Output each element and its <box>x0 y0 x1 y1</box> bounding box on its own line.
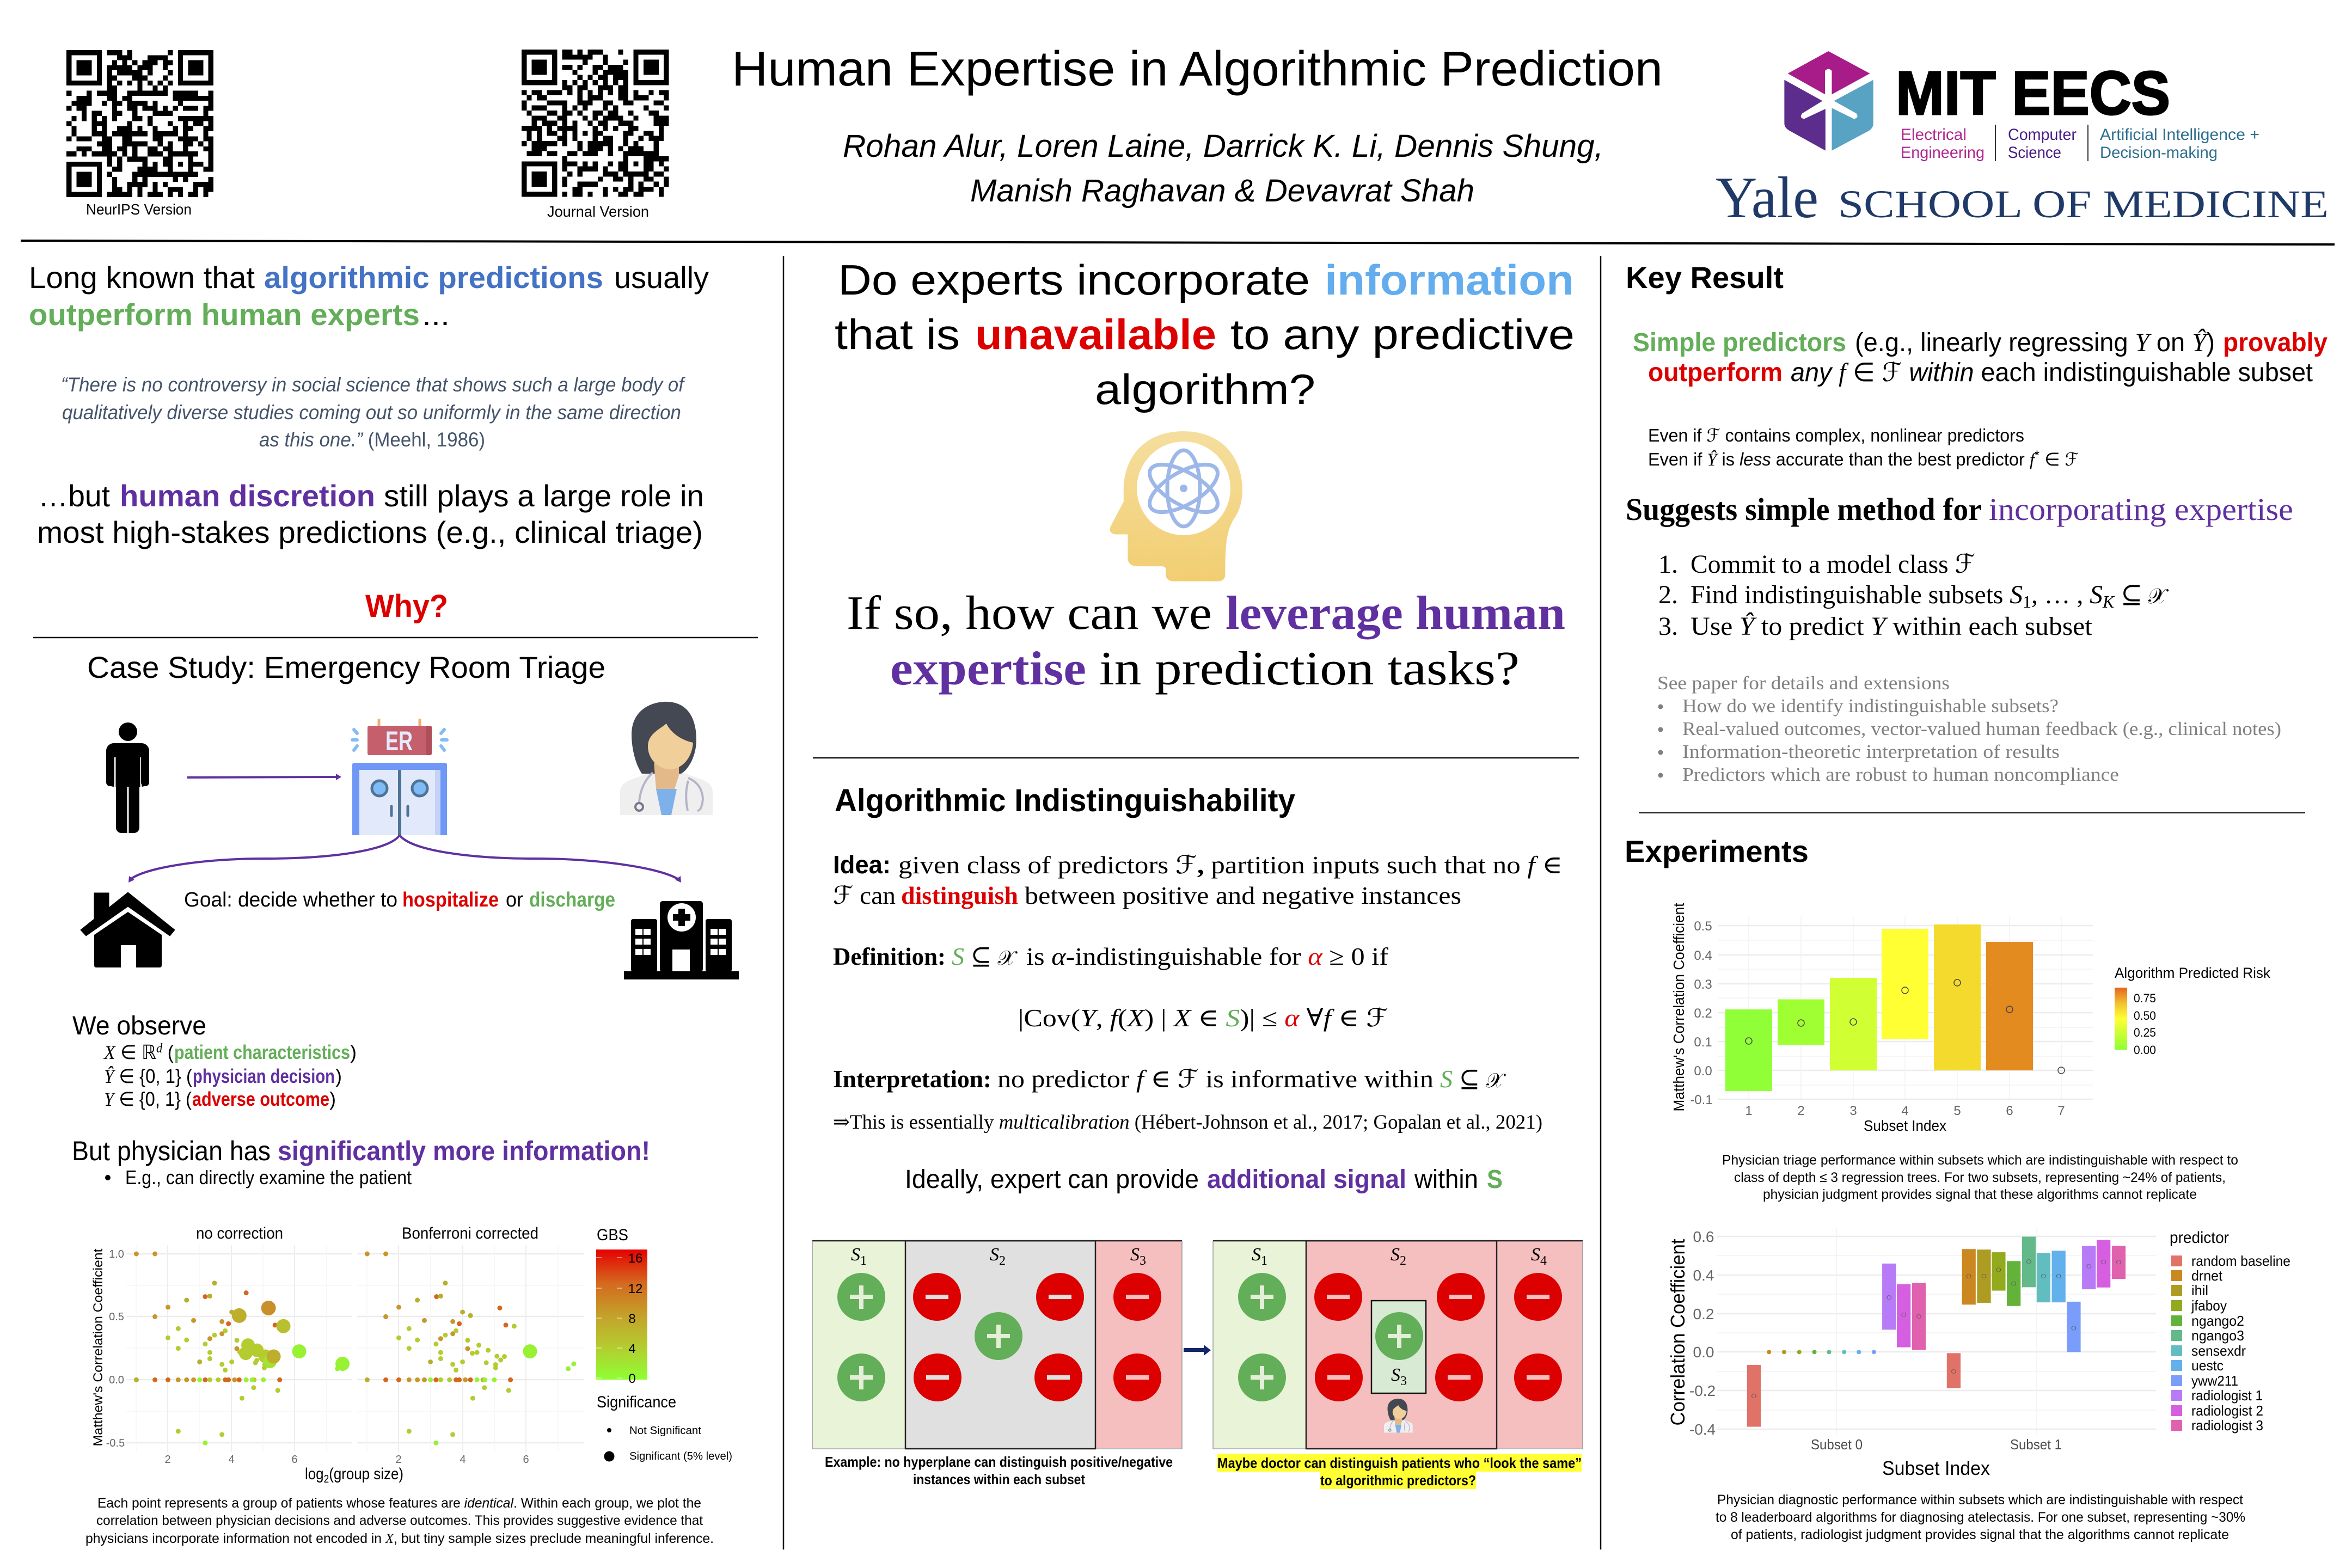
caption: triage: class of depth ≤ 3 regression trees. For two subsets, representing ~24% of patients, <box>1734 1170 2226 1185</box>
diagram: no hyperplane partition: 1 <box>860 1254 867 1268</box>
caption: example: Example: no hyperplane can distinguish positive/negative <box>825 1454 1173 1470</box>
text block: physician information <box>72 1136 650 1189</box>
caption: example: instances within each subset <box>913 1471 1085 1487</box>
legend: predictor: jfaboy <box>2191 1297 2227 1314</box>
axis labels: 0.5 <box>109 1311 124 1323</box>
QR code: NeurIPS version: NeurIPS Version <box>86 201 192 218</box>
list: method steps: 𝒳 <box>2148 584 2169 609</box>
list: see paper <box>1657 672 2281 785</box>
legend: predictor: ngango2 <box>2191 1313 2244 1329</box>
legend: GBS: 12 <box>628 1282 642 1296</box>
text block: multicalibration: ⇒This is essentially multicalibration (Hébert-Johnson et al., 2017; Gopalan et al., 2021) <box>833 1111 1542 1134</box>
list: method steps: Use Ŷ to predict Y within each subset <box>1690 612 2093 641</box>
legend: algorithm predicted risk: 0.50 <box>2134 1009 2156 1022</box>
chart: radiology bar chart: 0.2 <box>1693 1306 1714 1322</box>
quote: qualitatively diverse studies coming out so uniformly in the same direction <box>62 401 681 424</box>
diagram: no hyperplane partition: 3 <box>1140 1254 1146 1268</box>
chart: triage bar chart: 2 <box>1797 1104 1805 1118</box>
list: see paper: How do we identify indistinguishable subsets? <box>1682 695 2059 716</box>
chart: radiology bar chart: Subset Index <box>1882 1457 1990 1479</box>
diagram: doctor distinguishes subset: S <box>1391 1245 1400 1265</box>
text block: algorithmic predictions: algorithmic predictions <box>264 260 603 295</box>
text: additional signal: within <box>1414 1165 1478 1194</box>
heading: leverage expertise: in prediction tasks? <box>1099 642 1520 695</box>
text block: we observe: ) <box>350 1041 357 1063</box>
chart: GBS scatter: log <box>305 1465 327 1483</box>
icon: doctor <box>620 702 713 815</box>
list: method steps: 1. <box>1658 550 1678 579</box>
chart: triage bar chart: 1 <box>1745 1104 1753 1118</box>
logo: MIT EECS: Science <box>2008 144 2061 162</box>
icon: head with atom <box>1110 431 1242 581</box>
heading: research question: information <box>1325 256 1574 304</box>
text block: we observe: physician decision <box>193 1065 335 1087</box>
axis labels: 4 <box>228 1454 235 1466</box>
text block: algorithmic predictions: ... <box>422 297 450 332</box>
list: method steps: 1 <box>2023 592 2031 611</box>
text block: even if: ℱ <box>2065 449 2079 470</box>
axis labels: 2 <box>164 1454 171 1466</box>
legend: algorithm predicted risk: 0.25 <box>2134 1026 2156 1039</box>
panel: left column <box>29 260 758 1546</box>
heading: research question: that is <box>835 310 960 358</box>
diagram: doctor distinguishes subset: 2 <box>1400 1254 1406 1268</box>
heading: research question: Do experts incorporate <box>838 256 1310 304</box>
text block: key result: Simple predictors <box>1633 328 1846 357</box>
diagram: doctor distinguishes subset: 1 <box>1261 1254 1267 1268</box>
callout: doctor question: Maybe doctor can distinguish patients who “look the same” <box>1217 1455 1582 1471</box>
text block: definition: is α-indistinguishable for α ≥ 0 if <box>1026 942 1389 970</box>
logo: MIT EECS: Artificial Intelligence + <box>2100 126 2259 144</box>
panel: right column <box>1625 260 2328 1542</box>
heading: suggests simple method <box>1626 492 2293 527</box>
heading: case study: Case Study: Emergency Room Triage <box>87 650 605 684</box>
list: see paper: See paper for details and extensions <box>1657 672 1950 694</box>
text block: key result: any f ∈ ℱ within each indistinguishable subset <box>1791 357 2313 388</box>
diagram: no hyperplane partition: S <box>990 1245 999 1265</box>
heading: research question: unavailable <box>975 310 1216 358</box>
text block: we observe: X ∈ ℝ <box>104 1041 159 1063</box>
chart: triage bar chart <box>1670 903 2093 1134</box>
legend: significance: Significant (5% level) <box>629 1450 732 1462</box>
text block: we observe: ) <box>335 1065 342 1087</box>
quote: “There is no controversy in social science that shows such a large body of <box>61 373 686 396</box>
chart: triage bar chart: 0.3 <box>1694 977 1712 992</box>
legend: predictor: radiologist 1 <box>2191 1387 2263 1404</box>
axis labels: 0.0 <box>109 1374 124 1386</box>
text: goal: or <box>506 889 523 911</box>
heading: research question: to any predictive <box>1230 310 1575 358</box>
text block: key result: provably <box>2223 328 2328 357</box>
text block: we observe: Y ∈ {0, 1} ( <box>104 1088 192 1110</box>
chart: triage bar chart: Subset Index <box>1864 1117 1946 1134</box>
icon: hospital <box>624 901 739 979</box>
heading: why: Why? <box>365 589 448 624</box>
text block: algorithmic predictions <box>29 260 709 332</box>
list: method steps: Commit to a model class ℱ <box>1690 549 1975 579</box>
text block: even if <box>1648 425 2079 470</box>
list: method steps: ⊆ <box>2114 580 2142 609</box>
heading: key result: Key Result <box>1626 260 1784 295</box>
text block: we observe: Ŷ ∈ {0, 1} ( <box>104 1065 192 1087</box>
legend: GBS: 4 <box>628 1342 636 1356</box>
text block: idea: distinguish <box>901 881 1018 909</box>
icon: MIT hexagon <box>1784 51 1873 151</box>
legend: significance: Not Significant <box>629 1425 701 1437</box>
legend: GBS <box>596 1226 647 1386</box>
chart: triage bar chart: 7 <box>2057 1104 2065 1118</box>
text block: human discretion: human discretion <box>120 479 375 513</box>
heading: experiments: Experiments <box>1625 834 1809 868</box>
logo: Yale School of Medicine: SCHOOL OF MEDICINE <box>1838 182 2329 226</box>
text block: human discretion: …but <box>38 479 110 513</box>
chart: radiology bar chart: -0.2 <box>1689 1382 1716 1399</box>
chart: triage bar chart: 0.1 <box>1694 1035 1712 1050</box>
caption: triage: Physician triage performance within subsets which are indistinguishable with respect to <box>1722 1153 2238 1168</box>
text block: even if: ∈ <box>2039 449 2065 469</box>
axis labels: 6 <box>291 1454 298 1466</box>
panel: center column <box>812 256 1583 1489</box>
legend: predictor: radiologist 3 <box>2191 1417 2263 1434</box>
quote <box>61 373 686 451</box>
chart: triage bar chart: 4 <box>1901 1104 1909 1118</box>
logo: MIT EECS <box>1784 51 2259 162</box>
list: method steps <box>1658 549 2169 641</box>
text block: interpretation: no predictor f ∈ ℱ is informative within <box>997 1064 1434 1093</box>
quote: as this one.” (Meehl, 1986) <box>259 428 485 451</box>
list: method steps: K <box>2102 592 2115 611</box>
caption: example <box>825 1454 1173 1487</box>
chart: GBS scatter: Matthew's Correlation Coefficient <box>91 1248 106 1446</box>
authors: Rohan Alur, Loren Laine, Darrick K. Li, Dennis Shung, <box>843 128 1603 164</box>
text block: human discretion: most high-stakes predictions (e.g., clinical triage) <box>37 515 703 549</box>
heading: research question: algorithm? <box>1095 365 1315 413</box>
text block: algorithmic predictions: outperform human experts <box>29 297 420 332</box>
legend: predictor: sensexdr <box>2191 1343 2246 1359</box>
logo: MIT EECS: Electrical <box>1901 126 1967 144</box>
text block: we observe: patient characteristics <box>174 1041 350 1063</box>
text block: we observe: We observe <box>72 1012 206 1040</box>
legend: predictor: random baseline <box>2191 1253 2290 1269</box>
legend: GBS: 16 <box>628 1251 642 1266</box>
caption: triage: physician judgment provides signal that these algorithms cannot replicate <box>1763 1187 2197 1202</box>
diagram: no hyperplane partition: 2 <box>999 1254 1006 1268</box>
heading: algorithmic indistinguishability: Algorithmic Indistinguishability <box>835 783 1295 818</box>
text block: even if: * <box>2035 448 2039 463</box>
legend: predictor: radiologist 2 <box>2191 1402 2263 1419</box>
chart: radiology bar chart: Subset 1 <box>2010 1436 2062 1453</box>
text block: interpretation <box>833 1064 1506 1093</box>
text: additional signal: Ideally, expert can provide <box>905 1165 1199 1194</box>
axis labels: 2 <box>395 1454 402 1466</box>
heading: suggests simple method: incorporating expertise <box>1989 492 2293 527</box>
chart: triage bar chart: Matthew's Correlation Coefficient <box>1670 903 1687 1112</box>
authors <box>843 128 1603 209</box>
chart: triage bar chart: 0.0 <box>1694 1064 1712 1079</box>
text block: definition: S ⊆ 𝒳 <box>952 942 1018 970</box>
arrow: partition refinement <box>1184 1345 1211 1356</box>
QR code: NeurIPS version <box>66 53 213 218</box>
formula: |Cov( Y, f(X) | X ∈ S)| ≤ α ∀f ∈ ℱ <box>1018 1003 1388 1032</box>
logo: Yale School of Medicine: Yale <box>1716 166 1818 230</box>
arrow: to home <box>128 835 400 883</box>
diagram: doctor distinguishes subset: S <box>1391 1365 1400 1385</box>
heading: suggests simple method: Suggests simple method for <box>1626 492 1982 527</box>
text block: idea: given class of predictors ℱ, partition inputs such that no f ∈ <box>898 850 1563 879</box>
text block: definition: Definition: <box>833 942 946 970</box>
text block: interpretation: S ⊆ 𝒳 <box>1440 1065 1506 1093</box>
heading: research question <box>835 256 1575 413</box>
text block: even if: Even if ℱ contains complex, nonlinear predictors <box>1648 425 2024 446</box>
text block: key result: (e.g., linearly regressing Y on Ŷ) <box>1855 328 2215 357</box>
legend: predictor: uestc <box>2191 1357 2224 1374</box>
text block: even if: Even if Ŷ is less accurate than the best predictor f <box>1648 449 2035 470</box>
logo: MIT EECS: Engineering <box>1901 144 1984 162</box>
diagram: no hyperplane partition: S <box>851 1245 860 1265</box>
legend: algorithm predicted risk <box>2115 965 2270 1057</box>
title: Human Expertise in Algorithmic Prediction <box>732 42 1663 96</box>
axis labels: 6 <box>523 1454 529 1466</box>
caption: scatter: correlation between physician decisions and adverse outcomes. This provides suggestive evidence that <box>96 1513 703 1528</box>
chart: radiology bar chart: 0.6 <box>1693 1228 1714 1245</box>
text: additional signal: S <box>1487 1165 1503 1194</box>
text block: we observe: ) <box>329 1088 336 1110</box>
legend: algorithm predicted risk: 0.00 <box>2134 1043 2156 1057</box>
text block: key result: outperform <box>1648 358 1783 387</box>
text block: idea: between positive and negative instances <box>1025 881 1461 909</box>
legend: predictor: drnet <box>2191 1267 2223 1284</box>
axis labels <box>106 1248 529 1466</box>
chart: triage bar chart: 3 <box>1849 1104 1857 1118</box>
chart: GBS scatter: Bonferroni corrected <box>402 1224 538 1242</box>
axis labels: 1.0 <box>109 1248 124 1260</box>
caption: scatter <box>85 1496 714 1546</box>
legend: GBS: 8 <box>628 1312 636 1326</box>
arrow: patient to ER <box>187 774 341 780</box>
chart: GBS scatter: 2 <box>324 1473 329 1485</box>
logo: MIT EECS: Computer <box>2008 126 2077 144</box>
legend: predictor: ihil <box>2191 1282 2208 1298</box>
legend: significance <box>597 1393 732 1462</box>
authors: Manish Raghavan & Devavrat Shah <box>970 173 1474 209</box>
text: goal: Goal: decide whether to <box>184 889 397 911</box>
text block: interpretation: Interpretation: <box>833 1065 991 1093</box>
caption: radiology <box>1716 1492 2245 1542</box>
legend: predictor: yww211 <box>2191 1373 2238 1389</box>
text: additional signal: additional signal <box>1207 1165 1406 1194</box>
legend: algorithm predicted risk: Algorithm Predicted Risk <box>2115 965 2270 981</box>
text block: physician information: But physician has <box>72 1136 271 1166</box>
axis labels: 4 <box>460 1454 466 1466</box>
chart: triage bar chart: -0.1 <box>1690 1093 1713 1107</box>
text: additional signal <box>905 1165 1503 1194</box>
caption: radiology: of patients, radiologist judgment provides signal that the algorithms cannot replicate <box>1731 1527 2229 1542</box>
list: see paper: Real-valued outcomes, vector-valued human feedback (e.g., clinical notes) <box>1682 718 2281 739</box>
chart: triage bar chart: 0.4 <box>1694 948 1712 963</box>
logo: Yale School of Medicine <box>1716 166 2329 230</box>
chart: GBS scatter <box>91 1224 584 1485</box>
caption: radiology: to 8 leaderboard algorithms for diagnosing atelectasis. For one subset, representing ~30% <box>1716 1510 2245 1525</box>
diagram: doctor distinguishes subset: 3 <box>1400 1374 1407 1388</box>
legend: GBS: 0 <box>628 1371 636 1386</box>
legend: GBS: GBS <box>597 1226 628 1244</box>
heading: leverage expertise: If so, how can we <box>847 587 1212 640</box>
axis labels: -0.5 <box>106 1437 125 1449</box>
caption: scatter: physicians incorporate information not encoded in X, but tiny sample sizes preclude meaningful inference. <box>85 1531 714 1546</box>
diagram: no hyperplane partition: S <box>1130 1245 1140 1265</box>
logo: MIT EECS: Decision-making <box>2100 144 2218 162</box>
text block: physician information: E.g., can directly examine the patient <box>125 1166 412 1189</box>
legend: predictor <box>2170 1229 2290 1434</box>
list: method steps: Find indistinguishable subsets S <box>1690 580 2023 609</box>
chart: radiology bar chart: -0.4 <box>1689 1421 1716 1438</box>
list: see paper: Information-theoretic interpretation of results <box>1682 741 2060 762</box>
text block: idea: Idea: <box>833 850 891 879</box>
list: method steps: , … , <box>2031 580 2090 609</box>
text block: idea: ℱ can <box>833 880 896 910</box>
text block: we observe: adverse outcome <box>192 1088 329 1110</box>
legend: algorithm predicted risk: 0.75 <box>2134 991 2156 1005</box>
legend: predictor: ngango3 <box>2191 1327 2244 1344</box>
icon: patient <box>106 722 149 833</box>
diagram: doctor distinguishes subset: S <box>1252 1245 1261 1265</box>
chart: triage bar chart: 6 <box>2006 1104 2013 1118</box>
caption: triage <box>1722 1153 2238 1202</box>
heading: leverage expertise: leverage human <box>1226 587 1565 640</box>
text block: physician information: significantly more information! <box>278 1136 650 1166</box>
text block: idea <box>833 850 1563 910</box>
caption: scatter: Each point represents a group of patients whose features are identical. Within each group, we plot the <box>97 1496 701 1511</box>
chart: triage bar chart: 5 <box>1953 1104 1961 1118</box>
legend: predictor: predictor <box>2170 1229 2229 1247</box>
chart: radiology bar chart: Subset 0 <box>1811 1436 1863 1453</box>
chart: GBS scatter: (group size) <box>329 1465 403 1483</box>
icon: home <box>81 892 175 967</box>
text block: we observe: ( <box>162 1041 174 1063</box>
chart: radiology bar chart: 0.0 <box>1693 1344 1714 1361</box>
heading: leverage expertise: expertise <box>890 642 1086 695</box>
text block: human discretion <box>37 479 704 549</box>
text: goal <box>184 889 615 911</box>
diagram: no hyperplane partition <box>812 1241 1182 1449</box>
callout: doctor question: to algorithmic predictors? <box>1320 1472 1476 1489</box>
text block: algorithmic predictions: Long known that <box>29 260 255 295</box>
heading: leverage expertise <box>847 587 1565 695</box>
text block: we observe <box>72 1012 357 1110</box>
arrow: to hospital <box>400 835 681 883</box>
list: method steps: 2. <box>1658 580 1678 609</box>
QR code: Journal version <box>522 52 669 220</box>
chart: radiology bar chart: Correlation Coefficient <box>1667 1239 1689 1425</box>
diagram: doctor distinguishes subset: S <box>1531 1245 1540 1265</box>
diagram: doctor distinguishes subset <box>1213 1241 1583 1449</box>
text block: definition <box>833 942 1389 970</box>
text block: algorithmic predictions: usually <box>614 260 709 295</box>
chart: GBS scatter: no correction <box>196 1224 283 1242</box>
chart: radiology bar chart: 0.4 <box>1693 1267 1714 1284</box>
text block: key result <box>1633 328 2328 388</box>
legend: significance: Significance <box>597 1393 676 1411</box>
callout: doctor question <box>1217 1454 1582 1489</box>
icon: emergency room: ER <box>385 726 413 756</box>
list: method steps: S <box>2090 580 2103 609</box>
QR code: Journal version: Journal Version <box>547 203 649 220</box>
chart: radiology bar chart <box>1667 1228 2156 1479</box>
list: see paper: Predictors which are robust to human noncompliance <box>1682 764 2119 785</box>
diagram: doctor distinguishes subset: 4 <box>1540 1254 1547 1268</box>
logo: MIT EECS: MIT EECS <box>1896 59 2170 127</box>
text: goal: hospitalize <box>402 889 499 911</box>
list: method steps: 3. <box>1658 612 1678 641</box>
chart: triage bar chart: 0.2 <box>1694 1006 1712 1021</box>
text block: human discretion: still plays a large role in <box>384 479 704 513</box>
icon: emergency room <box>352 719 447 835</box>
caption: radiology: Physician diagnostic performance within subsets which are indistinguishable with respect <box>1717 1492 2243 1508</box>
text: goal: discharge <box>529 889 615 911</box>
chart: triage bar chart: 0.5 <box>1694 919 1712 934</box>
text block: we observe: d <box>156 1042 163 1056</box>
